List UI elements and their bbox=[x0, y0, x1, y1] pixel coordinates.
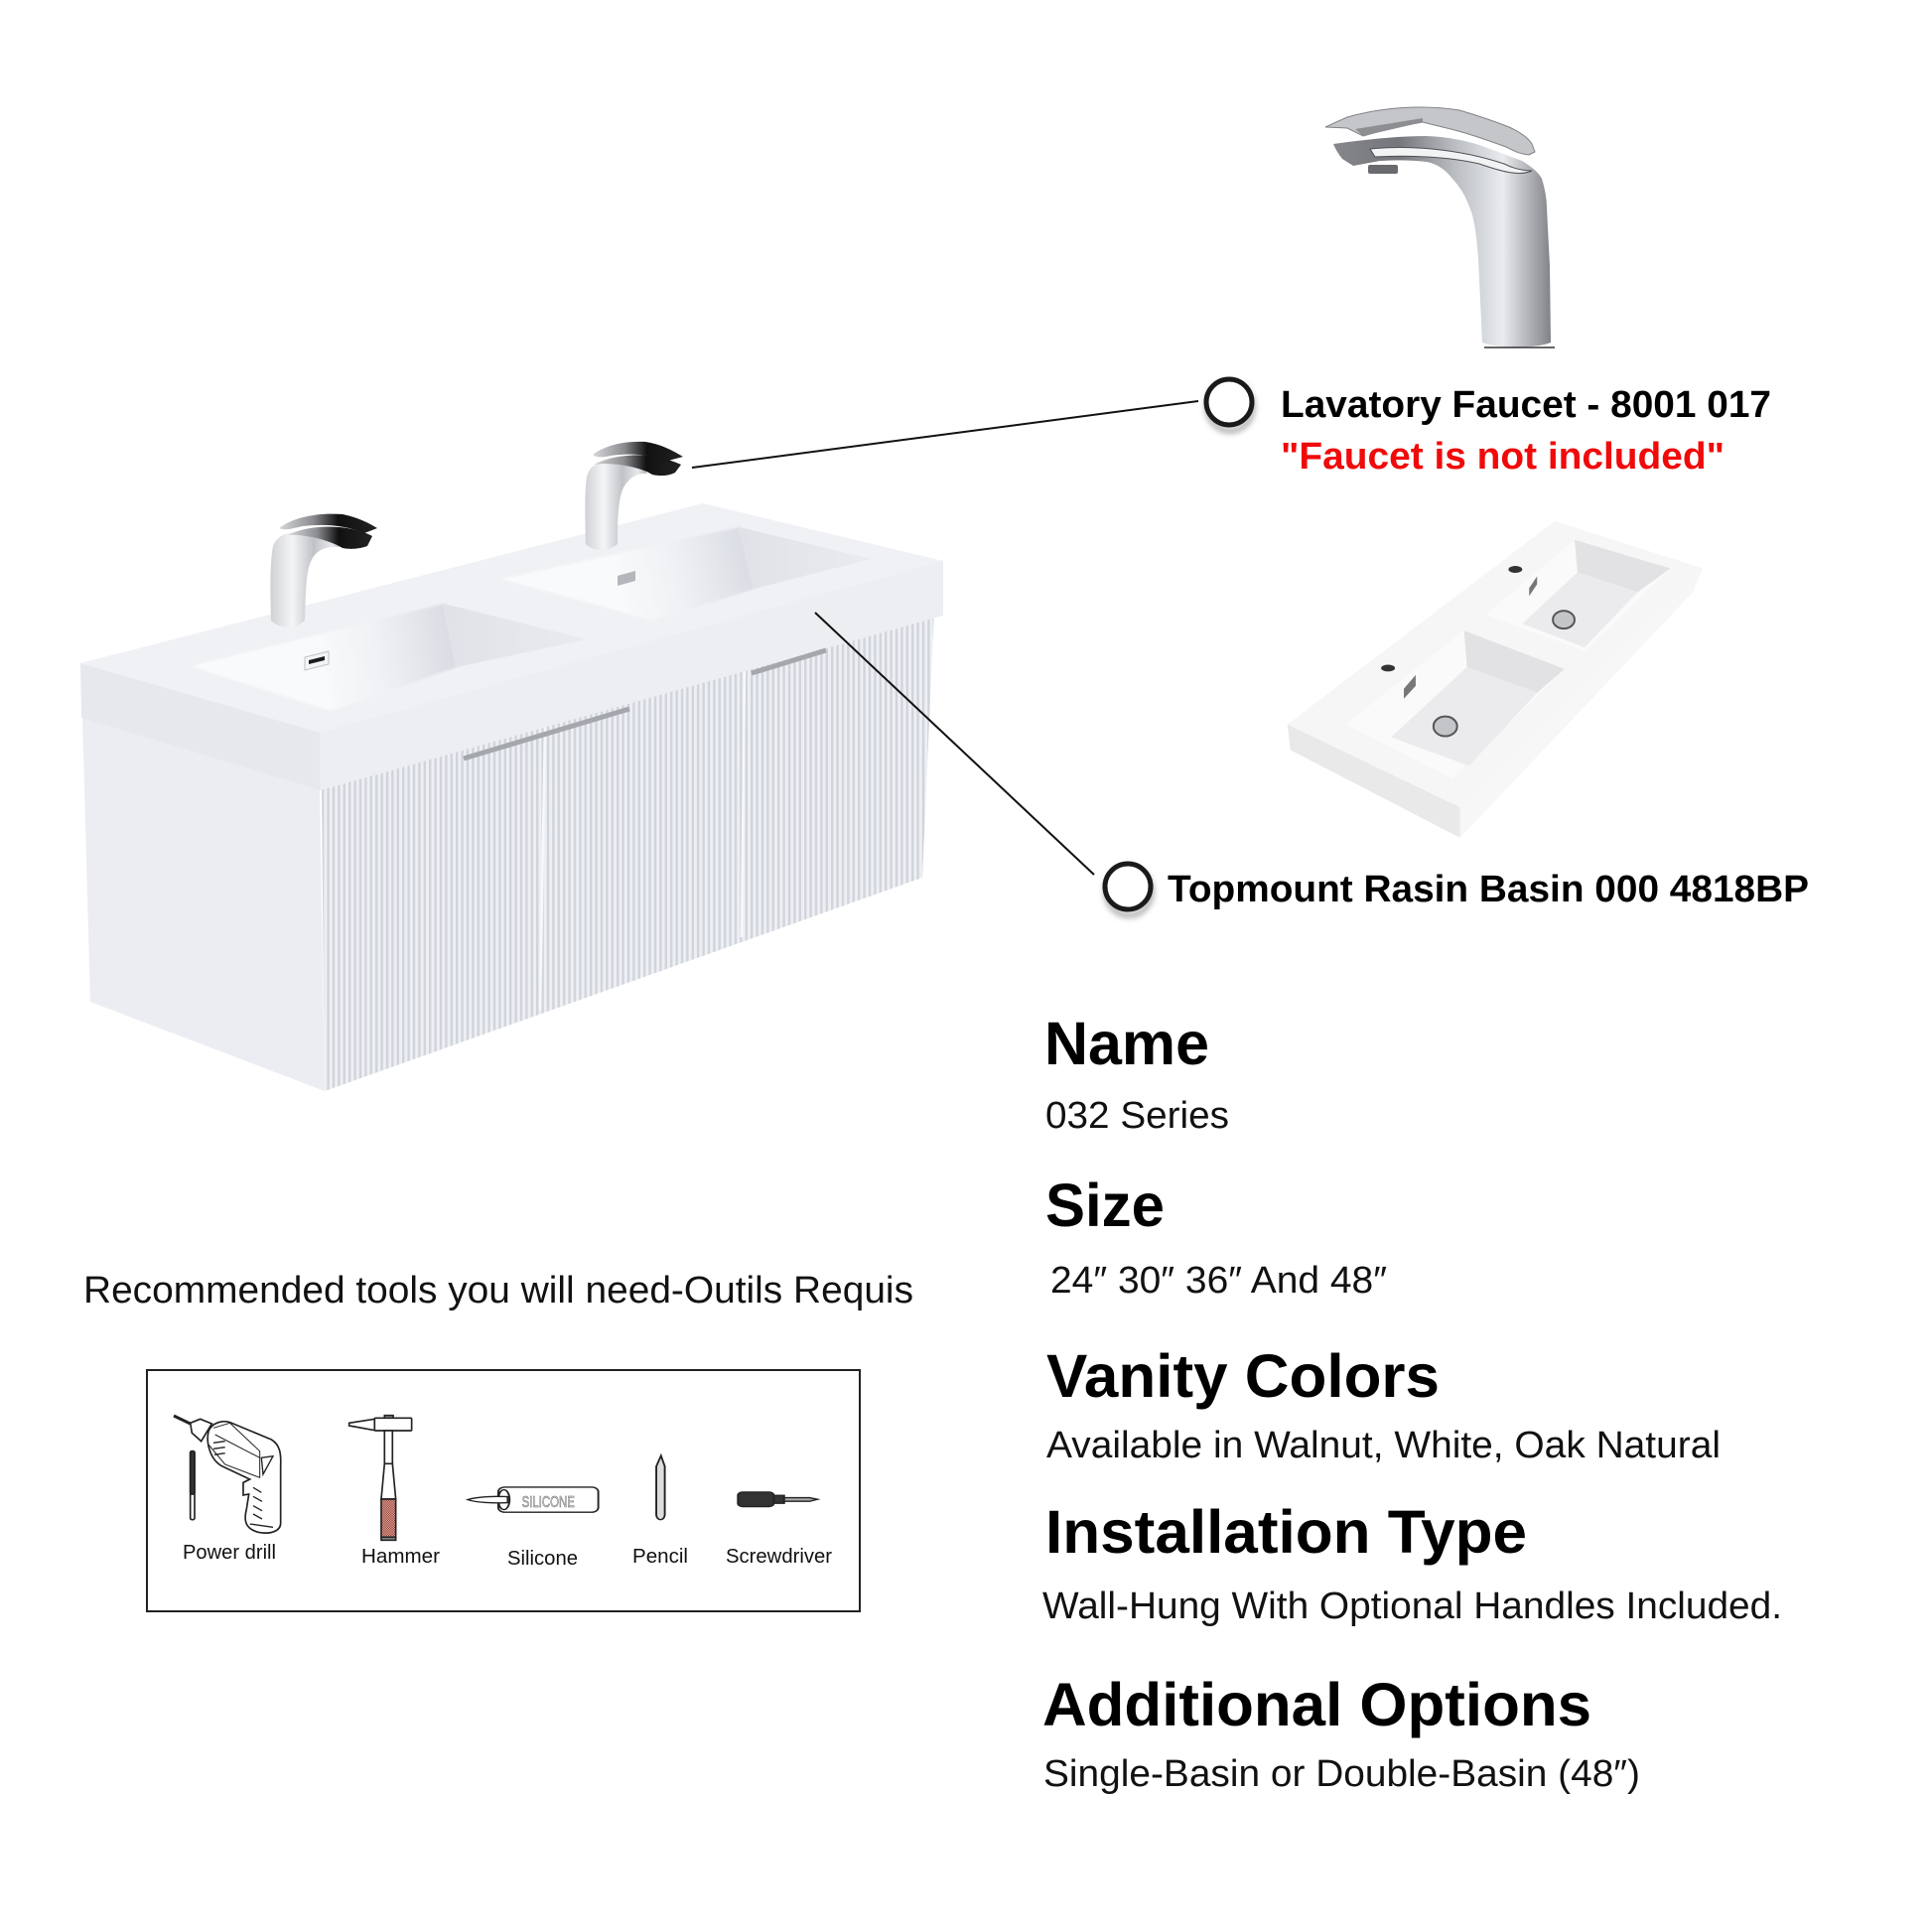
tools icons: silicone pencil screwdriver bbox=[468, 1455, 818, 1520]
right bowl bbox=[501, 527, 871, 621]
overflow slot: left bbox=[305, 651, 329, 670]
callout label: basin: Topmount Rasin Basin 000 4818BP bbox=[1168, 869, 1809, 910]
overflow slot: right bbox=[618, 571, 635, 586]
tool label: screwdriver: Screwdriver bbox=[726, 1546, 832, 1568]
spec: vanity colors bbox=[1046, 1342, 1721, 1466]
basin slab left face bbox=[80, 663, 321, 790]
cabinet side panel bbox=[82, 717, 325, 1091]
spec: additional options bbox=[1042, 1671, 1640, 1795]
rear bowl bbox=[1486, 540, 1670, 651]
tool label: pencil: Pencil bbox=[632, 1546, 688, 1568]
spec: additional options: Additional Options bbox=[1042, 1671, 1591, 1738]
basin deck bbox=[1288, 521, 1703, 807]
callout note: faucet not included: "Faucet is not included" bbox=[1281, 436, 1725, 478]
front bowl bbox=[1345, 630, 1565, 778]
basin outer faces bbox=[1288, 725, 1460, 838]
tools frame bbox=[147, 1370, 860, 1611]
spec: additional options: Single-Basin or Double-Basin (48″) bbox=[1043, 1753, 1640, 1795]
silicone tube label: SILICONE bbox=[522, 1493, 575, 1510]
spec: installation type: Installation Type bbox=[1045, 1498, 1527, 1566]
right faucet bbox=[585, 442, 683, 550]
icon: pencil bbox=[656, 1455, 665, 1520]
callout circle: basin bbox=[1105, 864, 1152, 915]
spec: installation type bbox=[1042, 1498, 1782, 1627]
double basin product image bbox=[1288, 521, 1703, 838]
vanity product image bbox=[80, 442, 943, 1091]
leader line: faucet bbox=[692, 401, 1198, 468]
callout circle: faucet bbox=[1206, 379, 1253, 431]
door seams bbox=[540, 667, 745, 1011]
faucet base shadow bbox=[1484, 346, 1555, 348]
icon: silicone tube bbox=[468, 1487, 599, 1512]
tools heading: Recommended tools you will need-Outils Requis bbox=[83, 1270, 913, 1311]
tool label: silicone: Silicone bbox=[507, 1548, 578, 1570]
spec: name: 032 Series bbox=[1045, 1095, 1229, 1137]
basin slab front face bbox=[320, 561, 943, 790]
leader line: basin bbox=[815, 613, 1094, 875]
door handles bbox=[464, 650, 826, 759]
spec: vanity colors: Vanity Colors bbox=[1046, 1342, 1440, 1410]
faucet aerator bbox=[1368, 165, 1398, 174]
left bowl bbox=[191, 604, 587, 711]
spec: size: Size bbox=[1045, 1172, 1165, 1239]
left faucet bbox=[270, 514, 377, 627]
icon: power drill bbox=[174, 1416, 281, 1533]
spec: size: 24″ 30″ 36″ And 48″ bbox=[1050, 1260, 1387, 1302]
spec: name bbox=[1044, 1010, 1229, 1137]
faucet spout top detail bbox=[1370, 148, 1532, 173]
icon: hammer bbox=[349, 1416, 412, 1540]
faucet product image bbox=[1325, 107, 1555, 347]
spec: vanity colors: Available in Walnut, White, Oak Natural bbox=[1046, 1425, 1721, 1466]
icon: screwdriver bbox=[738, 1492, 818, 1507]
drains bbox=[1553, 611, 1575, 628]
tool label: hammer: Hammer bbox=[361, 1546, 440, 1568]
tap holes bbox=[1508, 566, 1522, 573]
faucet handle bbox=[1325, 107, 1535, 155]
overflow slots bbox=[1529, 576, 1537, 596]
callout label: faucet: Lavatory Faucet - 8001 017 bbox=[1281, 384, 1771, 426]
tools panel bbox=[147, 1370, 860, 1611]
faucet spout body bbox=[1333, 136, 1551, 347]
tool label: power drill: Power drill bbox=[183, 1542, 276, 1564]
fluted cabinet front bbox=[322, 610, 934, 1091]
spec: name: Name bbox=[1044, 1010, 1209, 1077]
spec: installation type: Wall-Hung With Optional Handles Included. bbox=[1042, 1586, 1782, 1627]
faucet handle dark inset bbox=[1355, 118, 1423, 136]
basin slab top bbox=[80, 503, 943, 733]
spec: size bbox=[1045, 1172, 1387, 1302]
